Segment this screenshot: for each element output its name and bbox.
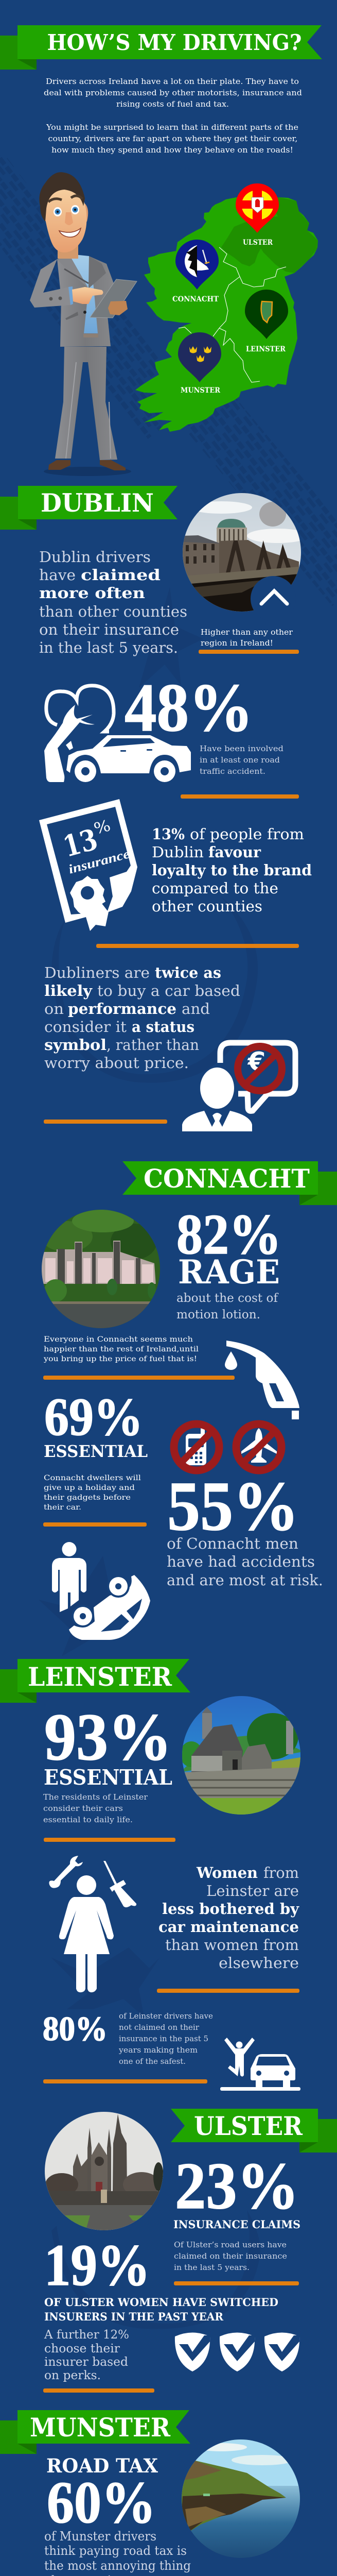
text: Connacht happier: Everyone in Connacht seems much [44,1335,193,1344]
text: loyalty to the brand: compared to the [152,879,278,897]
text: status symbol: a status [132,1018,194,1036]
stat: 19% switched insurers: OF ULSTER WOMEN HAVE SWITCHED [44,2296,278,2309]
stat: 23% insurance claims: INSURANCE CLAIMS [173,2218,300,2231]
text: status symbol: performance [68,1000,176,1018]
text: status symbol: on [44,1000,64,1018]
stat: road tax 60%: think paying road tax is [44,2544,187,2558]
text: Connacht happier: you bring up the price of fuel that is! [43,1355,197,1363]
text: Connacht gadgets: give up a holiday and [44,1484,135,1492]
icon: person with crossed-out euro speech bubble: € [247,1047,265,1077]
text: further 12% perks: A further 12% [44,2328,129,2342]
text: status symbol: to buy a car based [97,982,240,999]
stat: road tax 60%: of Munster drivers [44,2529,156,2544]
text: loyalty to the brand: other counties [152,897,262,915]
banner: Leinster [0,1659,190,1703]
text: road traffic accident: traffic accident. [200,768,265,776]
stat: 23% insurance claims: 23% [175,2149,299,2223]
icon: jumping man and car [220,2038,300,2091]
icon: insurance certificate: % [92,817,113,838]
intro text: You might be surprised to learn that in different parts of the [46,124,298,132]
text: Dublin claims: on their insurance [39,621,179,638]
stat: 55% Connacht men: and are most at risk. [167,1571,323,1589]
icon: no phone [174,1424,219,1470]
stat: 23% insurance claims: claimed on their insurance [174,2252,287,2261]
text: further 12% perks: choose their [44,2342,120,2355]
stat: 69% essential: 69% [44,1387,143,1447]
text: women from Leinster: Women [196,1864,258,1882]
text: loyalty to the brand: favour [208,843,261,861]
stat: 82% rage [176,1203,281,1321]
text: road traffic accident: in at least one road [200,756,280,765]
photo: Kylemore Abbey, Connacht [42,1210,160,1328]
text: status symbol [44,964,240,1072]
text: Dublin claims: in the last 5 years. [39,639,178,656]
stat: 19% switched insurers: INSURERS IN THE PAST YEAR [44,2310,224,2323]
text: women from Leinster [158,1864,299,1972]
banner: Leinster: LEINSTER [28,1662,172,1692]
label: Connacht: CONNACHT [172,295,219,303]
text: loyalty to the brand [152,825,312,915]
banner: Munster [0,2410,190,2454]
stat: 55% Connacht men: of Connacht men [167,1535,298,1552]
text: further 12% perks [44,2328,129,2382]
intro text: how much they spend and how they behave on the roads! [51,146,293,155]
stat: 80% no claims: of Leinster drivers have [119,2012,213,2021]
stat: 19% switched insurers: 19% [44,2232,150,2298]
stat: 80% no claims: not claimed on their [119,2024,199,2032]
text: status symbol: Dubliners are [44,964,150,981]
stat: 82% rage: motion lotion. [176,1308,260,1321]
caption: higher than any other region [201,629,293,648]
text: status symbol: , rather than [107,1036,199,1054]
text: Dublin claims: have [39,566,76,584]
stat: 23% insurance claims: Of Ulster’s road users have [174,2241,287,2249]
text: women from Leinster: from [263,1864,299,1882]
stat: 93% essential: essential to daily life. [43,1816,133,1824]
pin: Leinster [245,290,288,339]
stat: road tax 60%: 60% [47,2470,156,2535]
stat: road tax 60%: ROAD TAX [46,2454,158,2477]
stat: 80% no claims [43,2010,213,2066]
stat: 69% essential: ESSENTIAL [44,1442,148,1461]
text: loyalty to the brand: loyalty to the brand [152,861,312,879]
banner: Munster: MUNSTER [30,2412,170,2443]
notch with up chevron [251,576,296,621]
text: Dublin claims: claimed [81,566,161,584]
stat: 80% no claims: insurance in the past 5 [119,2035,208,2043]
photo: Munster coast [180,2437,304,2561]
caption: higher than any other region: region in Ireland! [201,639,273,648]
stat: 55% Connacht men: have had accidents [167,1553,315,1570]
banner: Dublin: DUBLIN [41,488,154,518]
icons: three shields with checkmarks [175,2333,299,2371]
banner: Ulster: ULSTER [194,2111,303,2141]
stat: road tax 60%: the most annoying thing [44,2558,191,2573]
stat: 93% essential [43,1700,172,1824]
pin: Connacht [175,240,219,290]
icon: person and overturned car [52,1542,150,1640]
stat: 82% rage: about the cost of [176,1292,278,1305]
banner: Ulster [171,2109,337,2153]
text: loyalty to the brand: Dublin [152,843,204,861]
text: loyalty to the brand: 13% [152,825,185,843]
text: women from Leinster: Leinster are [206,1882,299,1900]
stat: 82% rage: RAGE [178,1253,280,1292]
icon: insurance certificate [39,799,137,931]
text: Connacht gadgets: their gadgets before [44,1494,131,1502]
icon: insurance certificate: 13 [60,822,101,864]
text: status symbol: likely [44,982,93,999]
stat: 93% essential: The residents of Leinster [43,1793,148,1802]
icon: woman with wrench and screwdriver [49,1856,136,1992]
text: women from Leinster: car maintenance [158,1918,299,1936]
pin: Munster [178,332,221,382]
label: Munster: MUNSTER [181,386,220,395]
stat: 80% no claims: 80% [43,2010,108,2048]
stat: 55% Connacht men: 55% [167,1468,299,1545]
label: Ulster: ULSTER [243,239,273,247]
text: road traffic accident [200,745,283,776]
text: road traffic accident: Have been involved [200,745,283,753]
stat: 80% no claims: years making them [118,2046,198,2055]
text: status symbol: consider it [44,1018,127,1036]
icon: person with crossed-out euro speech bubble [182,1043,295,1131]
stat: 93% essential: 93% [44,1700,172,1774]
banner: Connacht: CONNACHT [144,1163,310,1194]
stat: 55% Connacht men [167,1468,323,1589]
photo: Glendalough, Leinster [180,1695,304,1816]
text: Dublin claims: than other counties [39,603,187,620]
stat: 93% essential: ESSENTIAL [44,1765,172,1790]
photo: cathedral, Ulster [44,2110,165,2233]
icon: no flights [236,1424,281,1470]
banner: Connacht [122,1161,337,1205]
icon: car crashed into tree [44,686,191,782]
stat: 23% insurance claims [173,2149,300,2272]
icon: fuel nozzle and drop [225,1341,299,1419]
stat: road tax 60% [44,2454,191,2576]
stat: 48%: 48% [125,669,253,745]
text: Connacht happier: happier than the rest of Ireland,until [44,1345,199,1353]
text: further 12% perks: insurer based [44,2355,128,2369]
text: women from Leinster: elsewhere [219,1954,299,1972]
text: Dublin claims: Dublin drivers [39,548,151,566]
intro text: Drivers across Ireland have a lot on their plate. They have to [46,78,299,86]
text: status symbol: twice as [155,964,221,981]
cartoon businessman with tablet [30,172,137,476]
text: further 12% perks: on perks. [44,2369,101,2382]
stat: 82% rage: 82% [176,1203,281,1266]
label: Leinster: LEINSTER [246,345,286,353]
text: women from Leinster: than women from [165,1936,299,1954]
intro text: rising costs of fuel and tax. [116,100,229,109]
intro text: country, drivers are far apart on where they get their cover, [48,135,297,143]
pin: Ulster [236,183,279,233]
stat: 19% switched insurers [44,2232,278,2323]
photo: Four Courts, Dublin [183,493,301,612]
text: Connacht happier [43,1335,199,1363]
intro text: deal with problems caused by other motorists, insurance and [44,89,302,97]
icon: insurance certificate: insurance [67,847,131,877]
text: status symbol: and [182,1000,210,1018]
text: Connacht gadgets: Connacht dwellers will [44,1474,141,1482]
stat: 80% no claims: one of the safest. [119,2058,186,2066]
text: Connacht gadgets: their car. [44,1503,81,1512]
text: women from Leinster: less bothered by [162,1900,299,1918]
title text: HOW’S MY DRIVING? [47,30,301,55]
text: Dublin claims: more often [39,584,145,602]
caption: higher than any other region: Higher than any other [201,629,293,637]
text: Dublin claims [39,548,187,656]
text: status symbol: worry about price. [44,1054,189,1072]
text: Connacht gadgets [44,1474,141,1512]
banner: Dublin [0,486,178,530]
map of Ireland [135,183,318,432]
title banner [0,25,322,70]
stat: 23% insurance claims: in the last 5 years. [174,2264,250,2272]
text: loyalty to the brand: of people from [190,825,304,843]
text: status symbol: symbol [44,1036,107,1054]
intro text [44,78,302,155]
stat: 93% essential: consider their cars [43,1805,123,1813]
